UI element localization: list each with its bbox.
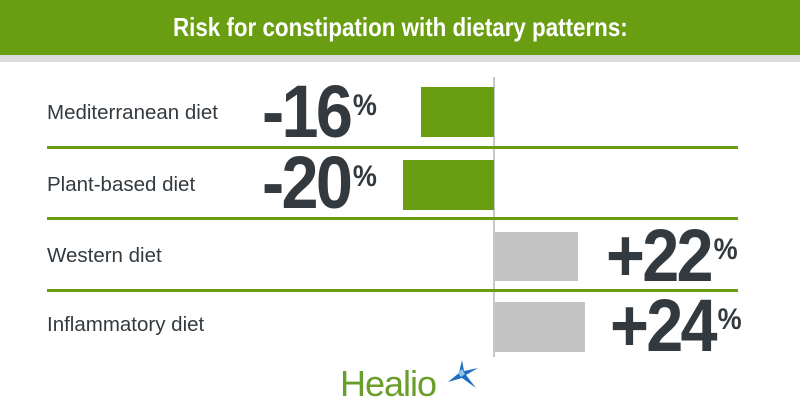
label: Inflammatory diet (47, 313, 204, 336)
row: Inflammatory (47, 284, 742, 367)
row: Mediterranean (47, 70, 494, 153)
label: Western diet (47, 244, 162, 267)
header bar (0, 0, 800, 55)
bar (495, 302, 585, 352)
title: Risk for constipation with dietary patterns: (173, 12, 627, 42)
icon: star (448, 360, 478, 388)
value: +22% (606, 214, 738, 297)
logo: Healio: Healio (340, 363, 436, 404)
value: -20% (262, 141, 377, 224)
bar (421, 87, 494, 137)
value: +24% (610, 284, 742, 367)
row: Plant-based (47, 141, 494, 224)
label: Mediterranean diet (47, 101, 218, 124)
label: Plant-based diet (47, 173, 195, 196)
value: -16% (262, 70, 377, 153)
row: Western (47, 214, 738, 297)
logo: Healio (340, 360, 478, 404)
bar (403, 160, 494, 210)
bar (495, 232, 578, 281)
axis line (493, 77, 495, 357)
